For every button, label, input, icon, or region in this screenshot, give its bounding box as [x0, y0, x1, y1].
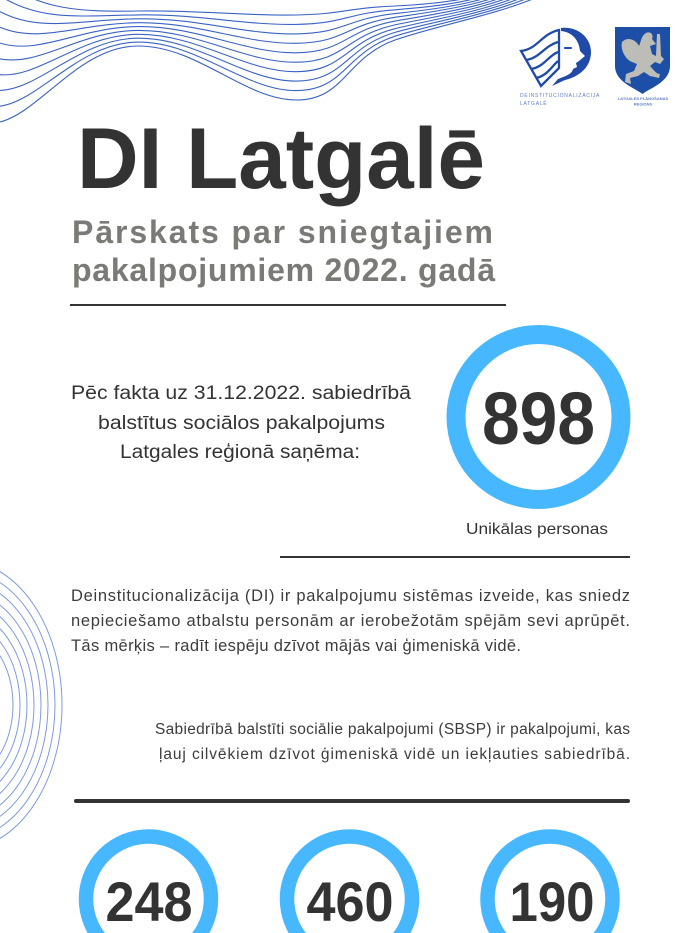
shield caption: LATGALES PLĀNOŠANAS: [618, 96, 669, 101]
intro text: balstītus sociālos pakalpojums: [98, 413, 385, 434]
stat circle: 190: [488, 836, 612, 933]
logo: coat of arms shield: REĢIONS: [634, 102, 653, 106]
definition: SBSP: ļauj cilvēkiem dzīvot ģimeniskā vidē un iekļauties sabiedrībā.: [159, 746, 630, 763]
definition: SBSP: Sabiedrībā balstīti sociālie pakalpojumi (SBSP) ir pakalpojumi, kas: [155, 721, 630, 738]
subtitle: pakalpojumiem 2022. gadā: [72, 252, 495, 288]
logo: coat of arms shield: [615, 27, 670, 106]
logo: Deinstitucionalizācija Latgalē: LATGALĒ: [520, 100, 547, 107]
stat circle: 460: [287, 836, 412, 933]
definition: deinstitutionalisation: [71, 587, 630, 655]
main stat circle: 898: 898: [482, 377, 595, 460]
main stat circle: 898: [456, 334, 621, 500]
title: DI Latgalē: [77, 111, 485, 207]
definition: SBSP: [155, 721, 630, 763]
definition: deinstitutionalisation: Tās mērķis – radīt iespēju dzīvot mājās vai ģimeniskā vidē.: [71, 637, 521, 655]
subtitle: Pārskats par sniegtajiem: [72, 214, 493, 250]
stat caption: Unikālas personas: [466, 521, 608, 538]
decorative wave lines top: [0, 0, 535, 122]
intro text: Pēc fakta uz 31.12.2022. sabiedrībā: [71, 383, 411, 404]
stat circle: 460: 460: [306, 870, 394, 933]
stat circle: 190: 190: [510, 870, 594, 933]
stat circle: 248: [86, 836, 211, 933]
stat circle: 248: 248: [106, 870, 192, 933]
logo caption: DEINSTITUCIONALIZĀCIJA: [520, 92, 600, 99]
intro text: Latgales reģionā saņēma:: [120, 442, 360, 463]
divider: [74, 799, 630, 803]
definition: deinstitutionalisation: Deinstitucionalizācija (DI) ir pakalpojumu sistēmas izveide, kas sniedz: [71, 587, 630, 605]
definition: deinstitutionalisation: nepieciešamo atbalstu personām ar ierobežotām spējām sevi aprūpēt.: [71, 612, 630, 630]
logo: Deinstitucionalizācija Latgalē: [520, 28, 600, 107]
decorative arc lines left: [0, 560, 62, 850]
divider: [280, 556, 630, 558]
subtitle: [72, 214, 495, 288]
intro text: [71, 383, 411, 463]
divider: [70, 304, 506, 306]
